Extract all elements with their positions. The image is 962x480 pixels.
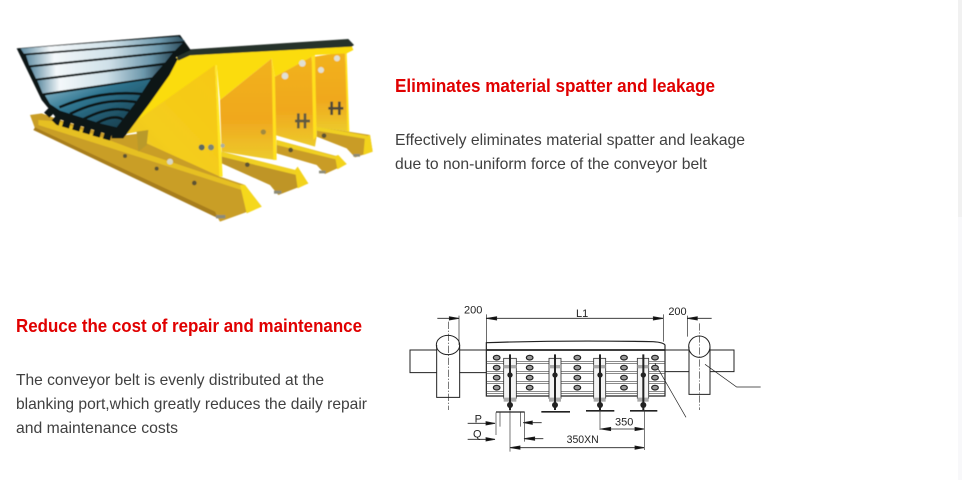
dimension labels: 350XN bbox=[567, 434, 599, 446]
dimension labels: Q bbox=[473, 429, 482, 441]
left roller bbox=[437, 345, 460, 397]
slots bbox=[493, 355, 658, 390]
text block: spatter: due to non-uniform force of the conveyor belt bbox=[395, 156, 708, 173]
dimension arrows bbox=[437, 317, 712, 449]
main front rail bbox=[30, 113, 262, 222]
illustration: yellow impact bed with black impact bars bbox=[17, 35, 373, 222]
bolts bbox=[123, 55, 360, 218]
dimension labels bbox=[464, 304, 687, 446]
extension lines bbox=[459, 314, 687, 345]
technical drawing bbox=[410, 304, 761, 452]
dimension labels: 200 bbox=[464, 304, 482, 316]
top black edge bbox=[177, 39, 354, 61]
brackets bbox=[504, 358, 649, 398]
rear rail sections bbox=[222, 127, 373, 195]
text block: cost: blanking port,which greatly reduces the daily repair bbox=[16, 396, 368, 413]
text block: cost bbox=[16, 372, 368, 437]
right roller bbox=[689, 347, 710, 394]
P Q bracket lines bbox=[496, 410, 644, 452]
dimension labels: P bbox=[475, 413, 482, 425]
centre lines bbox=[449, 322, 700, 410]
dimension labels: L1 bbox=[576, 308, 588, 320]
heading: spatter: Eliminates material spatter and leakage bbox=[395, 76, 715, 96]
rear support plates bbox=[220, 52, 349, 160]
bolt slots and support brackets bbox=[493, 354, 658, 452]
crossbeam bbox=[410, 350, 734, 373]
leader lines bbox=[655, 363, 761, 417]
black impact bars with light bands bbox=[17, 35, 191, 137]
dimension labels: 200 bbox=[668, 306, 687, 318]
text block: cost: The conveyor belt is evenly distributed at the bbox=[16, 372, 324, 389]
bed frame bbox=[486, 341, 665, 396]
top yellow back plate bbox=[117, 42, 353, 135]
dimension labels: 350 bbox=[615, 417, 633, 429]
text block: cost: and maintenance costs bbox=[16, 420, 178, 437]
text block: spatter bbox=[395, 132, 745, 173]
text block: spatter: Effectively eliminates material spatter and leakage bbox=[395, 132, 745, 149]
main triangular support plate bbox=[115, 65, 220, 177]
heading: cost: Reduce the cost of repair and maintenance bbox=[16, 316, 362, 336]
scrollbar track bbox=[958, 0, 962, 480]
